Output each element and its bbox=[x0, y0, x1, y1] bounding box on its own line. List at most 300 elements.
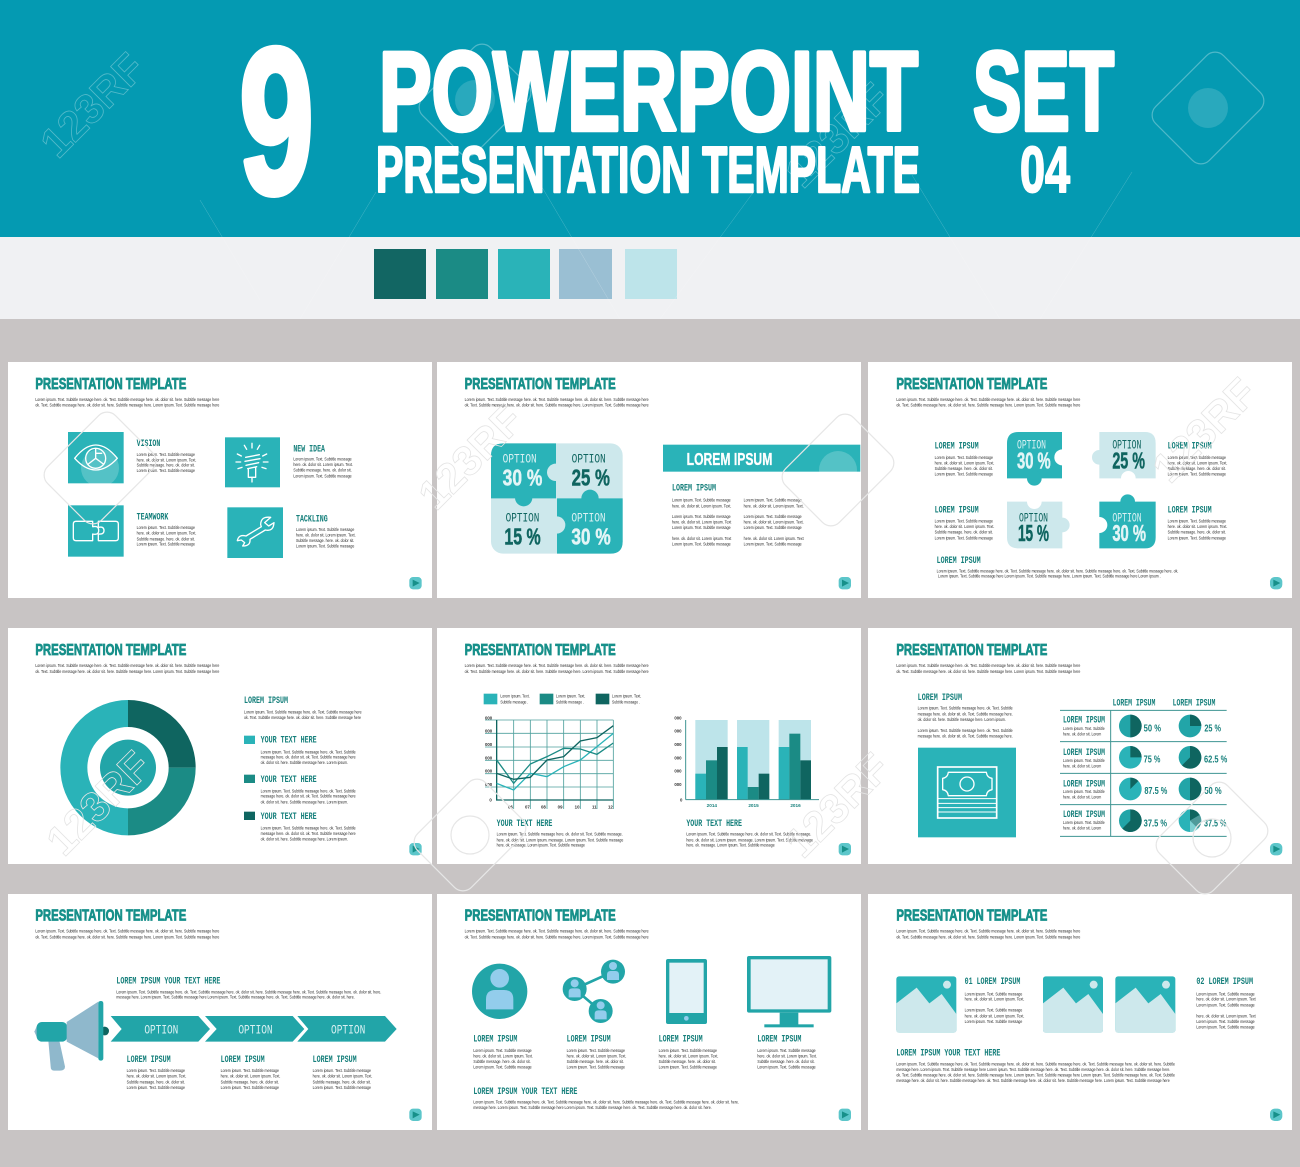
text: line chart caption: here. ok. message. Lorem ipsum. Text. Subtitle message bbox=[497, 843, 585, 848]
text: column 1: here. ok. dolor sit. Lorem ipsum. Text. bbox=[127, 1074, 186, 1079]
legend item 3: message here. ok. dolor sit. ok. Text. Subtitle message here bbox=[261, 831, 356, 836]
slide subtitle: Lorem ipsum. Text. Subtitle message here. ok. Text. Subtitle message here. ok. dolor sit. here. Subtitle message here bbox=[465, 663, 649, 668]
text: bottom: message here. ok. dolor sit. here. Subtitle message here. ok. Text. Subtitle message here. ok. dolor sit. here. Subtitle message here. Lorem ipsum. Text. Subtitle message here bbox=[896, 1078, 1170, 1083]
text: bottom: LOREM IPSUM YOUR TEXT HERE bbox=[473, 1086, 577, 1097]
text: tackling: Subtitle message. here. ok. dolor sit. bbox=[296, 538, 354, 543]
pie table: 62.5 % bbox=[1204, 755, 1227, 766]
slide subtitle: ok. Text. Subtitle message here. ok. dolor sit. here. Subtitle message here. Lorem ipsum. Text. Subtitle message here bbox=[896, 669, 1081, 674]
text: column 3: Lorem ipsum. Text. Subtitle message bbox=[313, 1068, 371, 1073]
icon: monitor bbox=[747, 956, 831, 1027]
icon: wrench bbox=[227, 507, 283, 558]
slide title: PRESENTATION TEMPLATE bbox=[35, 642, 187, 659]
text: top right: LOREM IPSUM bbox=[1168, 441, 1212, 452]
text: item 02: here. ok. dolor sit. Lorem ipsum. Text bbox=[1196, 997, 1256, 1002]
text: item 01: Lorem ipsum. Text. Subtitle message bbox=[965, 991, 1023, 996]
text: column 2: Lorem ipsum. Text. Subtitle message bbox=[567, 1065, 625, 1070]
puzzle chart: 30 % bbox=[503, 464, 543, 490]
text: column 2: LOREM IPSUM bbox=[221, 1054, 265, 1065]
panel: slide 4 donut bbox=[35, 642, 422, 855]
text: intro bbox=[918, 692, 1013, 739]
pie table: 25 % bbox=[1204, 723, 1221, 734]
slide subtitle bbox=[896, 397, 1081, 408]
panel: slide 8 devices bbox=[465, 908, 851, 1121]
text: bottom bbox=[896, 1048, 1175, 1083]
puzzle chart: OPTION bbox=[571, 512, 606, 527]
text: new idea: Lorem ipsum. Text. Subtitle message bbox=[293, 473, 352, 478]
icon: play button bbox=[1270, 843, 1282, 855]
legend item 2 bbox=[244, 774, 356, 804]
text: item 01 bbox=[965, 976, 1024, 1024]
icon: play button bbox=[839, 1109, 851, 1121]
text: bottom: Lorem ipsum. Text. Subtitle message here. ok. Text. Subtitle message here. ok. dolor sit. here. Subtitle message here. ok. Text. Subtitle message here. ok. bbox=[937, 568, 1178, 573]
slide title: PRESENTATION TEMPLATE bbox=[465, 642, 616, 659]
slide subtitle bbox=[896, 663, 1081, 674]
heading: SET: SET bbox=[973, 29, 1114, 154]
text: column 1: Subtitle message. here. ok. dolor sit. bbox=[127, 1079, 185, 1084]
line chart: 12 bbox=[608, 805, 613, 810]
text: column 2: Lorem ipsum. Text. Subtitle message bbox=[221, 1085, 279, 1090]
slide subtitle: Lorem ipsum. Text. Subtitle message here. ok. Text. Subtitle message here. ok. dolor sit. here. Subtitle message here bbox=[35, 397, 220, 402]
legend item 2: ok. dolor sit. here. Subtitle message here. Lorem ipsum. bbox=[261, 799, 348, 804]
pie table: here. ok. dolor sit. Lorem bbox=[1063, 731, 1101, 736]
text: item 01: Lorem ipsum. Text. Subtitle message bbox=[965, 1008, 1023, 1013]
subheading: presentation template: PRESENTATION TEMPLATE bbox=[376, 133, 920, 206]
slide subtitle: ok. Text. Subtitle message here. ok. dolor sit. here. Subtitle message here. Lorem ipsum. Text. Subtitle message here bbox=[35, 403, 220, 408]
text: lower right: here. ok. dolor sit. Lorem ipsum. Text. bbox=[1168, 524, 1227, 529]
line chart: 10 bbox=[575, 805, 580, 810]
text: top left: Lorem ipsum. Text. Subtitle message bbox=[935, 471, 993, 476]
chart legend: Subtitle message . bbox=[612, 699, 640, 704]
slide subtitle: ok. Text. Subtitle message here. ok. dolor sit. here. Subtitle message here. Lorem ipsum. Text. Subtitle message here bbox=[35, 935, 220, 940]
puzzle chart: OPTION bbox=[503, 453, 537, 468]
text: item 02 bbox=[1196, 976, 1256, 1030]
icon: play button bbox=[409, 843, 422, 855]
line chart: 000 bbox=[485, 769, 493, 774]
panel: slide 5 charts bbox=[465, 642, 851, 855]
text: bottom: LOREM IPSUM YOUR TEXT HERE bbox=[896, 1048, 1000, 1059]
line chart: 07 bbox=[525, 805, 530, 810]
text: teamwork: TEAMWORK bbox=[137, 511, 168, 522]
text: column 2: LOREM IPSUM bbox=[567, 1034, 611, 1045]
text: intro: LOREM IPSUM bbox=[244, 695, 288, 706]
text: column 3: LOREM IPSUM bbox=[313, 1054, 357, 1065]
puzzle piece: 30 percent: OPTION bbox=[1017, 439, 1046, 454]
puzzle chart: 30 % bbox=[571, 523, 611, 549]
text: top left: Subtitle message. here. ok. dolor sit. bbox=[935, 466, 993, 471]
text: intro bbox=[244, 695, 362, 720]
pie table: here. ok. dolor sit. Lorem bbox=[1063, 825, 1101, 830]
puzzle chart bbox=[491, 443, 623, 554]
slide title: PRESENTATION TEMPLATE bbox=[465, 376, 616, 393]
slide subtitle: ok. Text. Subtitle message here. ok. dolor sit. here. Subtitle message here. Lorem ipsum. Text. Subtitle message here bbox=[896, 935, 1081, 940]
line chart: 09 bbox=[558, 805, 563, 810]
text: item 01: here. ok. dolor sit. Lorem ipsum. Text. bbox=[965, 997, 1024, 1002]
puzzle piece: 15 percent: OPTION bbox=[1019, 511, 1048, 526]
text: column 2: here. ok. dolor sit. Lorem ipsum. Text. bbox=[221, 1074, 280, 1079]
text block: here. ok. dolor sit. Lorem ipsum. Text bbox=[672, 519, 732, 524]
arrow: option 2 bbox=[205, 1016, 304, 1042]
text: item 01: here. ok. dolor sit. Lorem ipsum. Text. bbox=[965, 1013, 1024, 1018]
text: bar chart caption: Lorem ipsum. Text. Subtitle message here. ok. dolor sit. Text. Subtitle message. bbox=[686, 832, 811, 837]
slide subtitle bbox=[35, 397, 220, 408]
big number 9: 9 bbox=[239, 6, 314, 238]
legend item 3: YOUR TEXT HERE bbox=[261, 811, 317, 822]
icon: play button bbox=[839, 843, 851, 855]
text: column 1 bbox=[127, 1054, 186, 1090]
text: bottom: LOREM IPSUM bbox=[937, 555, 981, 566]
header banner bbox=[0, 0, 1300, 238]
text: teamwork: Subtitle message. here. ok. dolor sit. bbox=[137, 536, 195, 541]
arrow: option 1 bbox=[111, 1016, 210, 1042]
slide subtitle: Lorem ipsum. Text. Subtitle message here. ok. Text. Subtitle message here. ok. dolor sit. here. Subtitle message here bbox=[465, 929, 649, 934]
text: top left bbox=[935, 441, 994, 476]
pie table: 50 % bbox=[1144, 723, 1161, 734]
heading: POWERPOINT: POWERPOINT bbox=[379, 29, 918, 154]
panel: slide 3 puzzle pieces bbox=[896, 376, 1282, 589]
text: bottom: message here. Lorem ipsum. Text. Subtitle message here Lorem ipsum. Text. Subtitle message here. ok. Text. Subtitle message here. ok. dolor sit. here. bbox=[473, 1105, 712, 1110]
slide subtitle bbox=[465, 663, 649, 674]
puzzle piece: 30 percent second bbox=[1091, 494, 1156, 548]
text: bottom: Lorem ipsum. Text. Subtitle message here. ok. Text. Subtitle message here. ok. dolor sit. here. Subtitle message here. ok. Text. Subtitle message here. ok. dolor sit. here. Subtitle bbox=[896, 1062, 1175, 1067]
legend item 3: Lorem ipsum. Text. Subtitle message here. ok. Text. Subtitle bbox=[261, 826, 356, 831]
text: column 2: Lorem ipsum. Text. Subtitle message bbox=[567, 1048, 625, 1053]
text: tackling: Lorem ipsum. Text. Subtitle message bbox=[296, 544, 355, 549]
text block: here. ok. dolor sit. Lorem ipsum. Text bbox=[672, 536, 732, 541]
text: intro bbox=[116, 976, 381, 1000]
text: top right: here. ok. dolor sit. Lorem ipsum. Text. bbox=[1168, 460, 1227, 465]
text: item 01: Lorem ipsum. Text. Subtitle message bbox=[965, 1019, 1023, 1024]
pie table: 87.5 % bbox=[1144, 786, 1167, 797]
text: intro: message here. ok. dolor sit. ok. Text. Subtitle message here. bbox=[918, 711, 1013, 716]
bar chart: 2014 bbox=[707, 803, 717, 808]
bar chart: 000 bbox=[674, 715, 682, 720]
text: lower right bbox=[1168, 504, 1227, 540]
legend item 2: message here. ok. dolor sit. ok. Text. Subtitle message here bbox=[261, 794, 356, 799]
text: column 3: Lorem ipsum. Text. Subtitle message bbox=[313, 1085, 371, 1090]
text: intro: LOREM IPSUM YOUR TEXT HERE bbox=[116, 976, 220, 987]
pie table: LOREM IPSUM bbox=[1063, 747, 1105, 758]
text: column 3: here. ok. dolor sit. Lorem ipsum. Text. bbox=[313, 1074, 372, 1079]
slide subtitle: Lorem ipsum. Text. Subtitle message here. ok. Text. Subtitle message here. ok. dolor sit. here. Subtitle message here bbox=[35, 663, 220, 668]
text: column 4 bbox=[757, 1034, 817, 1070]
pie table: 37.5 % bbox=[1204, 818, 1226, 829]
bar chart: 0 bbox=[680, 798, 683, 803]
watermarks: 123RF bbox=[31, 44, 154, 166]
text: column 3: LOREM IPSUM bbox=[659, 1034, 703, 1045]
text: column 2 bbox=[221, 1054, 280, 1090]
watermarks: 123RF bbox=[409, 396, 532, 518]
text block: Lorem ipsum. Text. Subtitle message bbox=[672, 542, 731, 547]
pie table: 50 % bbox=[1204, 786, 1222, 797]
panel: slide 2 puzzle square bbox=[465, 376, 860, 589]
text: intro: Lorem ipsum. Text. Subtitle message here. ok. Text. Subtitle message here bbox=[244, 709, 362, 714]
text: item 02: Lorem ipsum. Text. Subtitle message bbox=[1196, 991, 1255, 996]
pie table: 75 % bbox=[1144, 755, 1160, 766]
donut chart bbox=[74, 713, 182, 822]
text: line chart caption: YOUR TEXT HERE bbox=[497, 818, 552, 829]
text: new idea bbox=[293, 443, 353, 478]
panel: slide 6 table bbox=[896, 642, 1282, 855]
text: intro: message here. ok. dolor sit. ok. Text. Subtitle message here. bbox=[918, 734, 1013, 739]
slide subtitle: Lorem ipsum. Text. Subtitle message here. ok. Text. Subtitle message here. ok. dolor sit. here. Subtitle message here bbox=[465, 397, 649, 402]
line chart: 11 bbox=[592, 805, 597, 810]
text: lower left bbox=[935, 504, 994, 540]
text: lower left: Subtitle message. here. ok. dolor sit. bbox=[935, 530, 993, 535]
text: column 4: Lorem ipsum. Text. Subtitle message bbox=[757, 1065, 816, 1070]
text: column 3: Subtitle message. here. ok. dolor sit. bbox=[313, 1079, 371, 1084]
text: lower right: LOREM IPSUM bbox=[1168, 504, 1212, 515]
arrow: option 1: OPTION bbox=[144, 1023, 178, 1038]
text block: here. ok. dolor sit. Lorem ipsum. Text. bbox=[744, 503, 804, 508]
puzzle piece: 30 percent second: 30 % bbox=[1112, 520, 1146, 546]
puzzle chart: 25 % bbox=[572, 464, 610, 490]
icon: light bulb bbox=[225, 437, 280, 487]
text: top left: here. ok. dolor sit. Lorem ipsum. Text. bbox=[935, 460, 994, 465]
text: teamwork: here. ok. dolor sit. Lorem ipsum. Text. bbox=[137, 531, 196, 536]
panel: slide 1 icons bbox=[35, 376, 422, 589]
chart legend: Lorem ipsum. Text. bbox=[500, 694, 530, 699]
bar chart bbox=[674, 715, 819, 808]
icon: eye bbox=[68, 432, 124, 483]
text: lower left: here. ok. dolor sit. Lorem ipsum. Text. bbox=[935, 524, 994, 529]
text: top left: LOREM IPSUM bbox=[935, 441, 979, 452]
arrow: option 3 bbox=[297, 1016, 397, 1042]
chart legend: Subtitle message . bbox=[556, 699, 584, 704]
text: vision: Subtitle message. here. ok. dolor sit. bbox=[137, 463, 195, 468]
icon: play button bbox=[409, 577, 422, 589]
text: intro: message here. Lorem ipsum. Text. Subtitle message here Lorem ipsum. Text. Subtitle message here. ok. Text. Subtitle message here. ok. dolor sit. here. bbox=[116, 995, 355, 1000]
panel: slide 7 megaphone bbox=[34, 908, 422, 1121]
puzzle piece: 15 percent bbox=[1007, 494, 1070, 548]
text: tackling: Lorem ipsum. Text. Subtitle message bbox=[296, 527, 355, 532]
icon: play button bbox=[839, 577, 851, 589]
text block: here. ok. dolor sit. Lorem ipsum. Text. bbox=[672, 503, 731, 508]
text: tackling: here. ok. dolor sit. Lorem ipsum. Text. bbox=[296, 532, 356, 537]
text: item 02: 02 LOREM IPSUM bbox=[1196, 976, 1253, 987]
text: column 1: Lorem ipsum. Text. Subtitle message bbox=[127, 1085, 185, 1090]
slide subtitle: ok. Text. Subtitle message here. ok. dolor sit. here. Subtitle message here. Lorem ipsum. Text. Subtitle message here bbox=[35, 669, 220, 674]
legend item 1: Lorem ipsum. Text. Subtitle message here. ok. Text. Subtitle bbox=[261, 749, 356, 754]
pie table: LOREM IPSUM bbox=[1063, 778, 1105, 789]
text block bbox=[672, 482, 804, 547]
text: vision: here. ok. dolor sit. Lorem ipsum. Text. bbox=[137, 457, 196, 462]
slide title: PRESENTATION TEMPLATE bbox=[896, 642, 1048, 659]
line chart: 000 bbox=[485, 742, 493, 747]
slide subtitle bbox=[896, 929, 1081, 940]
text: column 4: Lorem ipsum. Text. Subtitle message bbox=[757, 1048, 816, 1053]
icon: tablet bbox=[666, 959, 707, 1024]
text: teamwork: Lorem ipsum. Text. Subtitle message bbox=[137, 542, 195, 547]
bar chart: 000 bbox=[674, 755, 682, 760]
text: column 1: Lorem ipsum. Text. Subtitle message bbox=[473, 1048, 532, 1053]
text block: Lorem ipsum. Text. Subtitle message bbox=[672, 498, 731, 503]
text: top right: Lorem ipsum. Text. Subtitle message bbox=[1168, 471, 1226, 476]
text: column 1 bbox=[473, 1034, 533, 1070]
text: item 02: Lorem ipsum. Text. Subtitle message bbox=[1196, 1019, 1255, 1024]
arrow: option 3: OPTION bbox=[331, 1023, 365, 1038]
puzzle piece: 30 percent second: OPTION bbox=[1112, 511, 1142, 526]
pie table: LOREM IPSUM bbox=[1113, 698, 1155, 709]
text: bar chart caption bbox=[686, 818, 813, 848]
text: column 3 bbox=[659, 1034, 718, 1070]
text block: Lorem ipsum. Text. Subtitle message bbox=[672, 514, 731, 519]
watermarks: 123RF bbox=[776, 74, 899, 196]
text: new idea: Lorem ipsum. Text. Subtitle message bbox=[293, 457, 352, 462]
slide subtitle bbox=[465, 929, 649, 940]
text: vision bbox=[137, 438, 196, 473]
text: bottom: Lorem ipsum. Text. Subtitle message here Lorem ipsum. Text. Subtitle message here. Lorem ipsum. Text. Subtitle message here Lorem ipsum . bbox=[938, 574, 1161, 579]
puzzle piece: 30 percent bbox=[1007, 432, 1070, 486]
text: column 3: here. ok. dolor sit. Lorem ipsum. Text. bbox=[659, 1053, 718, 1058]
text: bottom: message here. Lorem ipsum. Text. Subtitle message here Lorem ipsum. Text. Subtitle message here. ok. Text. Subtitle message here. ok. dolor sit. here. Subtitle message here. bbox=[896, 1067, 1170, 1072]
watermarks bbox=[31, 39, 1273, 899]
slide backgrounds bbox=[8, 362, 1292, 1130]
text: bar chart caption: here. ok. message. Lorem ipsum. Text. Subtitle message bbox=[686, 843, 775, 848]
pie table: Lorem ipsum. Text. Subtitle bbox=[1063, 726, 1105, 731]
puzzle piece: 25 percent: OPTION bbox=[1112, 439, 1141, 454]
line chart: 000 bbox=[485, 782, 493, 787]
slide subtitle: Lorem ipsum. Text. Subtitle message here. ok. Text. Subtitle message here. ok. dolor sit. here. Subtitle message here bbox=[896, 397, 1081, 402]
text: column 1: LOREM IPSUM bbox=[473, 1034, 517, 1045]
text block: Lorem ipsum. Text. Subtitle message bbox=[744, 525, 802, 530]
bar chart: 000 bbox=[674, 782, 682, 787]
text: intro: LOREM IPSUM bbox=[918, 692, 962, 703]
text: tackling: TACKLING bbox=[296, 513, 328, 524]
text block: Lorem ipsum. Text. Subtitle message bbox=[744, 542, 802, 547]
text: column 2 bbox=[567, 1034, 626, 1070]
text: lower right: Lorem ipsum. Text. Subtitle message bbox=[1168, 535, 1226, 540]
text: bottom bbox=[473, 1086, 739, 1110]
text: lower left: Lorem ipsum. Text. Subtitle message bbox=[935, 519, 993, 524]
legend item 1 bbox=[244, 735, 356, 765]
slide subtitle: Lorem ipsum. Text. Subtitle message here. ok. Text. Subtitle message here. ok. dolor sit. here. Subtitle message here bbox=[35, 929, 220, 934]
text: lower right: Lorem ipsum. Text. Subtitle message bbox=[1168, 519, 1226, 524]
pie table: LOREM IPSUM bbox=[1063, 715, 1105, 726]
banner: lorem ipsum: LOREM IPSUM bbox=[687, 449, 772, 469]
pie table: here. ok. dolor sit. Lorem bbox=[1063, 763, 1101, 768]
legend item 1: ok. dolor sit. here. Subtitle message here. Lorem ipsum. bbox=[261, 760, 348, 765]
puzzle chart: OPTION bbox=[572, 453, 606, 468]
text: column 2: Subtitle message. here. ok. dolor sit. bbox=[221, 1079, 279, 1084]
puzzle piece: 25 percent: 25 % bbox=[1112, 447, 1145, 473]
icon: network bbox=[563, 960, 625, 1023]
subheading: 04: 04 bbox=[1020, 133, 1070, 206]
text: bar chart caption: YOUR TEXT HERE bbox=[686, 818, 742, 829]
text: line chart caption: here. ok. dolor sit. Lorem ipsum. message. Lorem ipsum. Text. Subtitle message bbox=[497, 837, 624, 842]
slide title: PRESENTATION TEMPLATE bbox=[896, 376, 1048, 393]
text block: LOREM IPSUM bbox=[672, 482, 716, 493]
pie table bbox=[1060, 698, 1227, 836]
colour palette band bbox=[0, 237, 1300, 319]
text block: Lorem ipsum. Text. Subtitle message bbox=[744, 514, 802, 519]
text: column 2: Lorem ipsum. Text. Subtitle message bbox=[221, 1068, 279, 1073]
puzzle chart: OPTION bbox=[506, 512, 539, 527]
bar chart: 2015 bbox=[748, 803, 759, 808]
icon: megaphone bbox=[34, 1001, 109, 1071]
text: new idea: here. ok. dolor sit. Lorem ipsum. Text. bbox=[293, 462, 353, 467]
icon: picture 1 bbox=[896, 976, 956, 1033]
banner: lorem ipsum bbox=[663, 445, 860, 472]
legend item 1: message here. ok. dolor sit. ok. Text. Subtitle message here bbox=[261, 755, 356, 760]
text: lower left: Lorem ipsum. Text. Subtitle message bbox=[935, 535, 993, 540]
text: item 02: Lorem ipsum. Text. Subtitle message bbox=[1196, 1025, 1255, 1030]
text: item 01: 01 LOREM IPSUM bbox=[965, 976, 1020, 987]
text: bottom: Lorem ipsum. Text. Subtitle message here. ok. Text. Subtitle message here. ok. dolor sit. here. Subtitle message here. ok. Text. Subtitle message here. ok. dolor sit. here. bbox=[473, 1100, 739, 1105]
text: intro: ok. Text. Subtitle message here. ok. dolor sit. here. Subtitle message here bbox=[244, 715, 361, 720]
text: column 4: here. ok. dolor sit. Lorem ipsum. Text. bbox=[757, 1053, 817, 1058]
puzzle piece: 25 percent bbox=[1092, 432, 1156, 486]
text: vision: Lorem ipsum. Text. Subtitle message bbox=[137, 468, 195, 473]
bar chart: 000 bbox=[674, 769, 682, 774]
panel: slide 9 pictures bbox=[896, 908, 1282, 1121]
line chart: 000 bbox=[485, 715, 493, 720]
slide title: PRESENTATION TEMPLATE bbox=[35, 908, 187, 925]
slide subtitle bbox=[35, 663, 220, 674]
text: column 4: LOREM IPSUM bbox=[757, 1034, 801, 1045]
bar chart: 000 bbox=[674, 742, 682, 747]
text: teamwork: Lorem ipsum. Text. Subtitle message bbox=[137, 525, 195, 530]
text: bottom bbox=[937, 555, 1178, 579]
text: vision: VISION bbox=[137, 438, 160, 449]
icon: picture 2 bbox=[1043, 976, 1103, 1033]
line chart: 08 bbox=[541, 805, 546, 810]
text: intro: Lorem ipsum. Text. Subtitle message here. ok. Text. Subtitle message here. ok. dolor sit. here. Subtitle message here. ok. Text. Subtitle message here. ok. dolor sit. here. bbox=[116, 989, 381, 994]
text: tackling bbox=[296, 513, 356, 549]
text: column 1: Subtitle message. here. ok. dolor sit. bbox=[473, 1059, 531, 1064]
pie table: LOREM IPSUM bbox=[1063, 809, 1105, 820]
text: lower left: LOREM IPSUM bbox=[935, 504, 979, 515]
chart legend bbox=[484, 694, 641, 704]
pie table: here. ok. dolor sit. Lorem bbox=[1063, 794, 1101, 799]
text: column 3 bbox=[313, 1054, 372, 1090]
text: column 4: Subtitle message. here. ok. dolor sit. bbox=[757, 1059, 815, 1064]
line chart: 0 bbox=[489, 798, 492, 803]
text: lower right: Subtitle message. here. ok. dolor sit. bbox=[1168, 530, 1226, 535]
icon: play button bbox=[409, 1109, 422, 1121]
legend item 2: Lorem ipsum. Text. Subtitle message here. ok. Text. Subtitle bbox=[261, 788, 356, 793]
text: line chart caption bbox=[497, 818, 624, 848]
text: top right bbox=[1168, 441, 1227, 476]
slide subtitle: ok. Text. Subtitle message here. ok. dolor sit. here. Subtitle message here. Lorem ipsum. Text. Subtitle message here bbox=[465, 935, 649, 940]
slide subtitle: ok. Text. Subtitle message here. ok. dolor sit. here. Subtitle message here. Lorem ipsum. Text. Subtitle message here bbox=[465, 669, 649, 674]
line chart: 000 bbox=[485, 755, 493, 760]
slide title: PRESENTATION TEMPLATE bbox=[465, 908, 616, 925]
text: column 1: Lorem ipsum. Text. Subtitle message bbox=[127, 1068, 185, 1073]
watermarks: 123RF bbox=[776, 744, 899, 866]
puzzle piece: 30 percent: 30 % bbox=[1017, 447, 1051, 473]
slide title: PRESENTATION TEMPLATE bbox=[896, 908, 1048, 925]
legend item 3 bbox=[244, 811, 356, 842]
text: line chart caption: Lorem ipsum. Text. Subtitle message here. ok. dolor sit. Text. Subtitle message. bbox=[497, 832, 623, 837]
watermarks: 123RF bbox=[1143, 369, 1266, 491]
icon: person bbox=[472, 964, 527, 1019]
text: top left: Lorem ipsum. Text. Subtitle message bbox=[935, 455, 993, 460]
text: column 3: Lorem ipsum. Text. Subtitle message bbox=[659, 1048, 717, 1053]
text: new idea: Subtitle message. here. ok. dolor sit. bbox=[293, 468, 352, 473]
slide title: PRESENTATION TEMPLATE bbox=[35, 376, 187, 393]
text: item 02: Lorem ipsum. Text. Subtitle message bbox=[1196, 1002, 1255, 1007]
watermarks: 123RF bbox=[37, 742, 160, 864]
text: bottom: ok. Text. Subtitle message here. ok. dolor sit. here. Subtitle message here. Lorem ipsum. Text. Subtitle message here Lorem ipsum. Text. Subtitle message here. ok. Text. Subtitle bbox=[896, 1073, 1175, 1078]
text: column 1: LOREM IPSUM bbox=[127, 1054, 171, 1065]
slide subtitle: ok. Text. Subtitle message here. ok. dolor sit. here. Subtitle message here. Lorem ipsum. Text. Subtitle message here bbox=[896, 403, 1081, 408]
text: column 2: here. ok. dolor sit. Lorem ipsum. Text. bbox=[567, 1053, 626, 1058]
text: intro: ok. dolor sit. here. Subtitle message here. Lorem ipsum. bbox=[918, 717, 1006, 722]
legend item 2: YOUR TEXT HERE bbox=[261, 774, 317, 785]
text: intro: Lorem ipsum. Text. Subtitle message here. ok. Text. Subtitle bbox=[918, 728, 1013, 733]
legend item 3: ok. dolor sit. here. Subtitle message here. Lorem ipsum. bbox=[261, 837, 348, 842]
icon: play button bbox=[1270, 1109, 1282, 1121]
